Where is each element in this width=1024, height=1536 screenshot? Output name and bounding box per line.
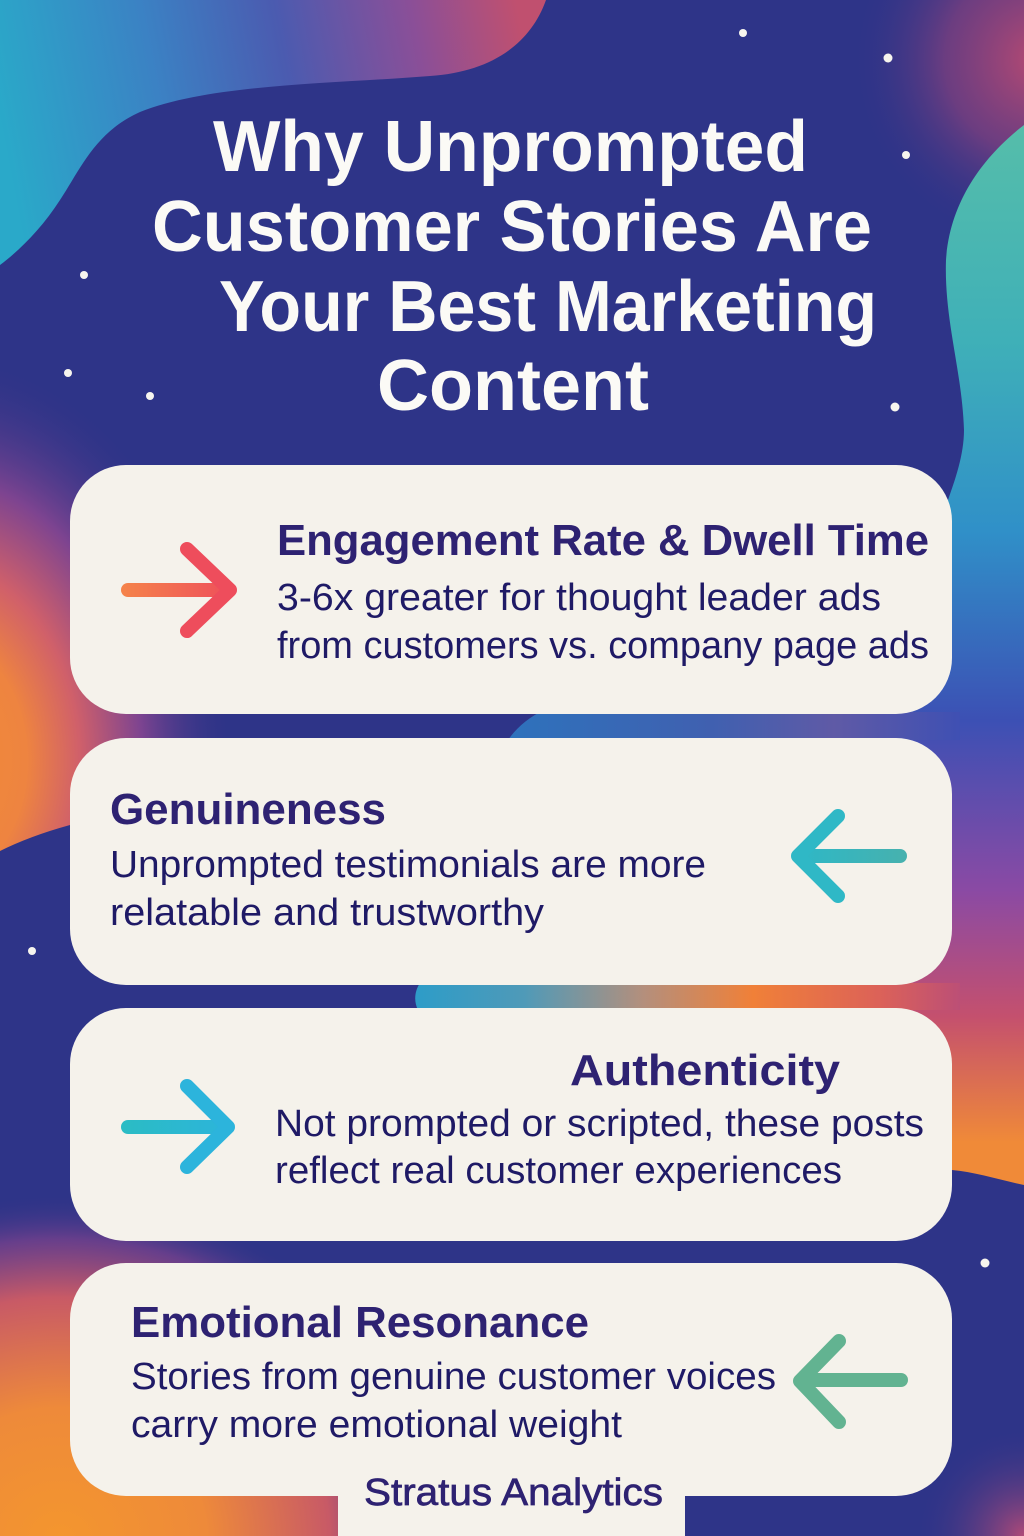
- text: genuineness description: Unprompted testimonials are more: [110, 844, 706, 886]
- text: engagement description: 3-6x greater for thought leader ads: [277, 577, 881, 619]
- title: Content: [377, 346, 649, 426]
- text: authenticity description: Not prompted or scripted, these posts: [275, 1103, 924, 1145]
- title: Why Unprompted: [213, 107, 808, 187]
- text: engagement description: [277, 577, 929, 667]
- footer tab: Stratus Analytics: [338, 1472, 685, 1536]
- text: genuineness description: [110, 844, 706, 934]
- heading: engagement rate and dwell time: Engagement Rate & Dwell Time: [277, 516, 929, 565]
- panel: engagement rate and dwell time: [70, 465, 952, 714]
- heading: emotional resonance: Emotional Resonance: [131, 1298, 589, 1347]
- decorative stars: [28, 29, 990, 1268]
- icon: teal arrow left: [798, 816, 900, 896]
- text: genuineness description: relatable and trustworthy: [110, 892, 544, 934]
- title: Your Best Marketing: [219, 267, 877, 347]
- icon: green arrow left: [800, 1341, 901, 1422]
- icon: red arrow right: [128, 549, 230, 631]
- footer tab: Stratus Analytics: Stratus Analytics: [364, 1472, 663, 1514]
- text: emotional resonance description: carry more emotional weight: [131, 1404, 622, 1446]
- panel: emotional resonance: [70, 1263, 952, 1496]
- text: engagement description: from customers vs. company page ads: [277, 625, 929, 667]
- text: authenticity description: reflect real customer experiences: [275, 1150, 842, 1192]
- panel: genuineness: [70, 738, 952, 985]
- text: authenticity description: [275, 1103, 924, 1192]
- heading: genuineness: Genuineness: [110, 785, 386, 834]
- heading: authenticity: Authenticity: [570, 1046, 841, 1095]
- title: [152, 107, 877, 426]
- icon: blue arrow right: [128, 1086, 228, 1167]
- text: emotional resonance description: Stories from genuine customer voices: [131, 1356, 776, 1398]
- title: Customer Stories Are: [152, 187, 872, 267]
- text: emotional resonance description: [131, 1356, 776, 1446]
- panel: authenticity: [70, 1008, 952, 1241]
